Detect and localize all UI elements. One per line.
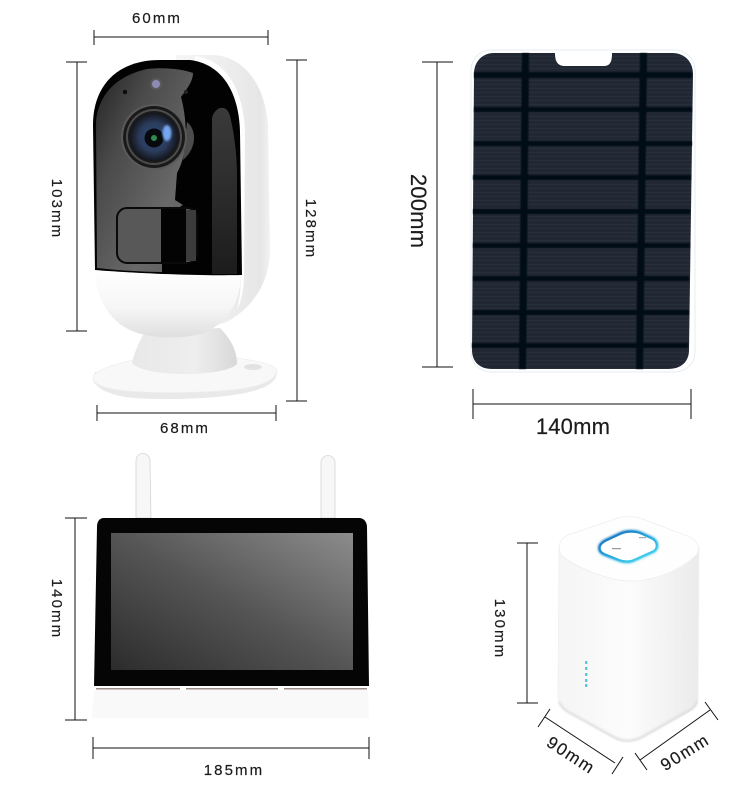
60mm width — [94, 30, 268, 45]
camera lower white body — [95, 270, 241, 337]
140mm height — [65, 518, 87, 720]
hub bottom shadow — [559, 701, 697, 741]
panel white frame — [471, 50, 695, 372]
90mm right — [635, 702, 718, 770]
panel dark surface — [472, 53, 693, 369]
camera mount neck — [132, 328, 237, 374]
dimensions: monitor — [48, 518, 369, 779]
hub — [558, 517, 699, 742]
camera face reflection — [212, 108, 237, 274]
monitor stand — [92, 690, 369, 718]
camera white rim — [195, 56, 245, 310]
camera back shell — [176, 55, 270, 332]
monitor bezel — [94, 518, 369, 686]
dimensions: hub: 90mm — [543, 733, 599, 778]
antennas — [136, 454, 335, 518]
hub status leds — [585, 661, 587, 687]
68mm width — [97, 405, 276, 421]
dimensions: camera — [48, 10, 319, 437]
hub body — [558, 547, 699, 742]
camera sensor window — [117, 208, 197, 263]
dimensions: solar panel: 140mm — [536, 414, 610, 439]
solar panel — [471, 50, 695, 372]
dimensions: camera: 68mm — [160, 420, 210, 437]
dimensions: camera: 103mm — [48, 179, 65, 239]
200mm height — [422, 62, 453, 367]
hub top — [559, 517, 698, 581]
130mm height — [517, 543, 538, 703]
camera black face — [93, 60, 242, 275]
128mm height — [286, 60, 307, 401]
103mm height — [66, 62, 87, 331]
hub light ring — [600, 532, 657, 562]
dimensions: monitor: 185mm — [204, 762, 264, 779]
monitor — [92, 454, 369, 718]
dimensions: camera: 128mm — [302, 199, 319, 259]
140mm width — [473, 389, 691, 419]
panel busbars — [472, 53, 692, 369]
dimensions: camera: 60mm — [132, 10, 182, 27]
dimensions: monitor: 140mm — [48, 579, 65, 639]
camera grey reflection — [96, 68, 193, 272]
dimensions: solar panel — [406, 62, 691, 439]
monitor screen — [111, 533, 353, 670]
dimensions: hub — [491, 543, 718, 778]
185mm width — [93, 737, 369, 759]
camera — [93, 55, 277, 399]
dimensions: hub: 90mm — [657, 730, 713, 775]
dimensions: solar panel: 200mm — [406, 174, 431, 248]
camera mount base — [93, 357, 277, 399]
90mm left — [538, 709, 623, 774]
dimensions: hub: 130mm — [491, 599, 508, 659]
camera lens — [121, 104, 194, 170]
camera ir dots — [123, 78, 188, 94]
